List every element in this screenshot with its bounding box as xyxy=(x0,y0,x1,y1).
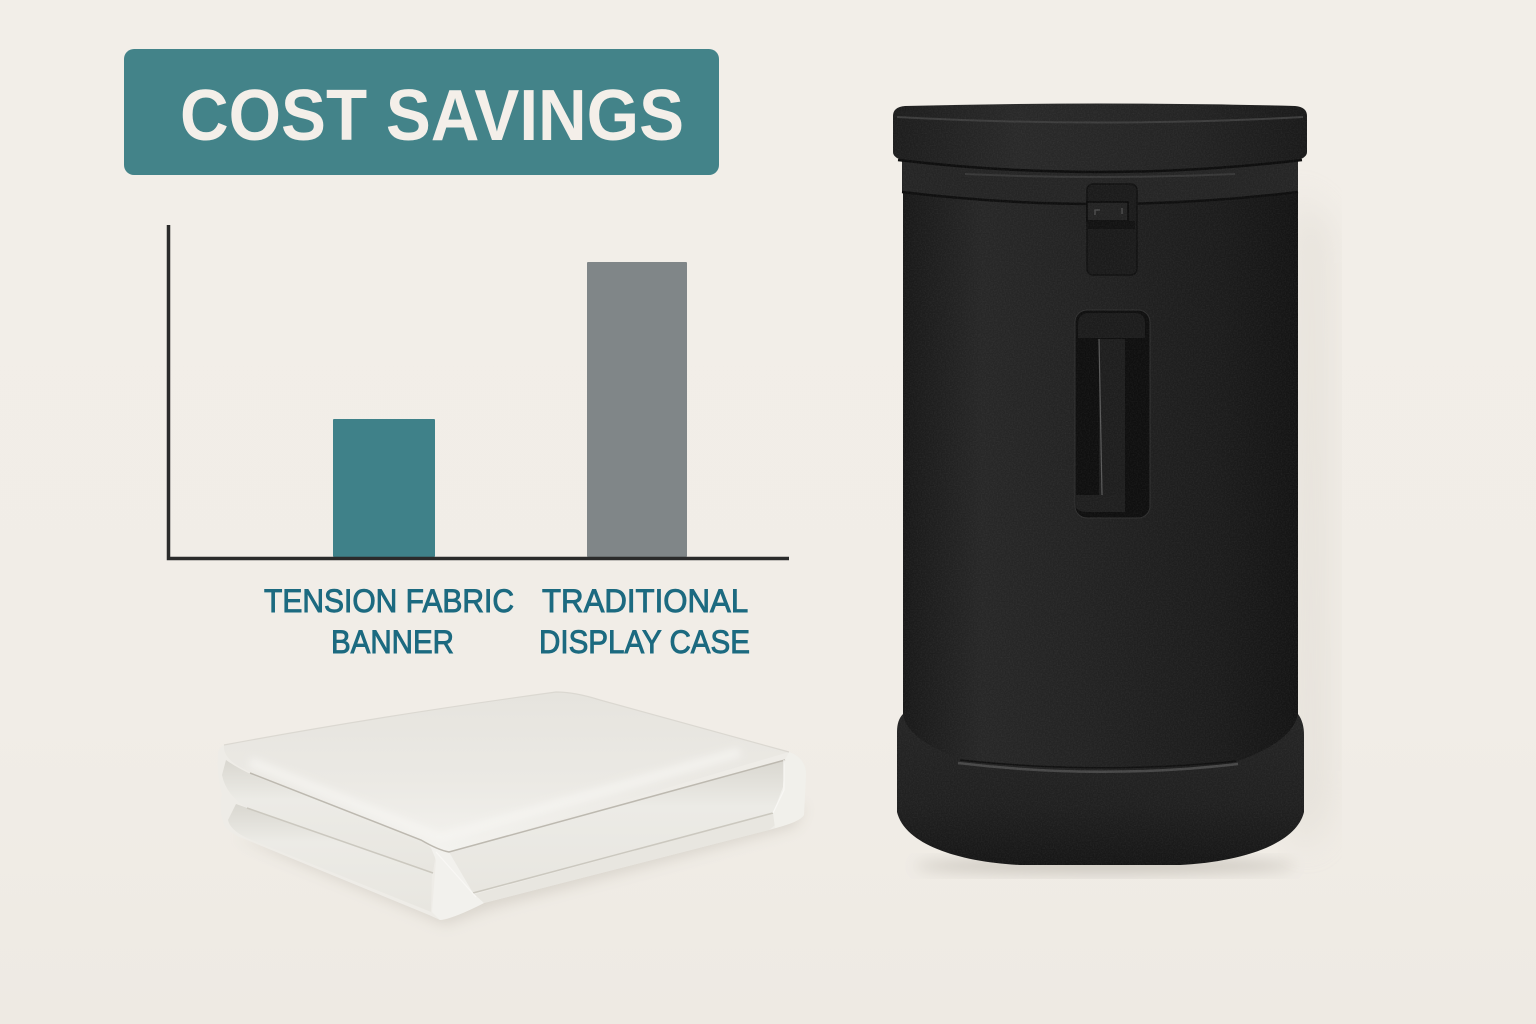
case surface grain xyxy=(893,104,1307,865)
fabric second layer left xyxy=(222,760,436,873)
title banner xyxy=(124,49,719,175)
neck highlight xyxy=(965,174,1235,177)
fabric right wrap xyxy=(773,752,806,828)
case floor shadow xyxy=(915,858,1295,874)
label: traditional display case: TRADITIONAL xyxy=(542,583,747,619)
display case xyxy=(893,104,1330,874)
latch xyxy=(1087,184,1137,275)
case neck xyxy=(902,150,1298,204)
fabric outer plastic wrap xyxy=(218,692,806,920)
label: tension fabric banner: TENSION FABRIC xyxy=(264,583,514,619)
bar chart xyxy=(168,225,789,660)
fabric fold creases xyxy=(250,760,785,852)
fabric third layer right xyxy=(455,813,784,916)
label: tension fabric banner: BANNER xyxy=(331,624,454,660)
handle bottom grip xyxy=(1075,495,1125,512)
handle top grip xyxy=(1078,313,1145,338)
case base xyxy=(897,714,1304,865)
latch back plate xyxy=(1087,184,1137,275)
fabric third layer left xyxy=(228,804,432,912)
handle strap xyxy=(1099,339,1125,496)
fabric shadow xyxy=(236,805,805,924)
neck seam xyxy=(902,192,1298,204)
bar: traditional display case xyxy=(587,262,687,557)
latch clasp xyxy=(1087,202,1128,221)
fabric fold highlight xyxy=(250,752,740,838)
base ridge highlight xyxy=(958,763,1238,772)
folded fabric banner xyxy=(218,692,806,924)
lid top edge highlight xyxy=(897,117,1303,122)
latch pins xyxy=(1095,208,1122,215)
latch tab xyxy=(1088,221,1135,229)
base ridge shadow xyxy=(960,760,1236,768)
handle xyxy=(1075,310,1150,518)
bar: tension fabric banner xyxy=(333,419,435,557)
handle recess xyxy=(1075,310,1150,518)
case shadow xyxy=(1290,190,1330,850)
case body xyxy=(903,190,1298,790)
handle strap edge xyxy=(1099,339,1102,495)
fabric second layer right xyxy=(449,760,785,893)
fabric corner fold xyxy=(429,843,484,920)
label: traditional display case: DISPLAY CASE xyxy=(539,624,750,660)
fabric top panel xyxy=(224,692,789,852)
chart axes xyxy=(168,225,789,558)
lid shadow line xyxy=(898,160,1302,172)
title: COST SAVINGS xyxy=(180,76,684,156)
case lid xyxy=(893,104,1307,170)
